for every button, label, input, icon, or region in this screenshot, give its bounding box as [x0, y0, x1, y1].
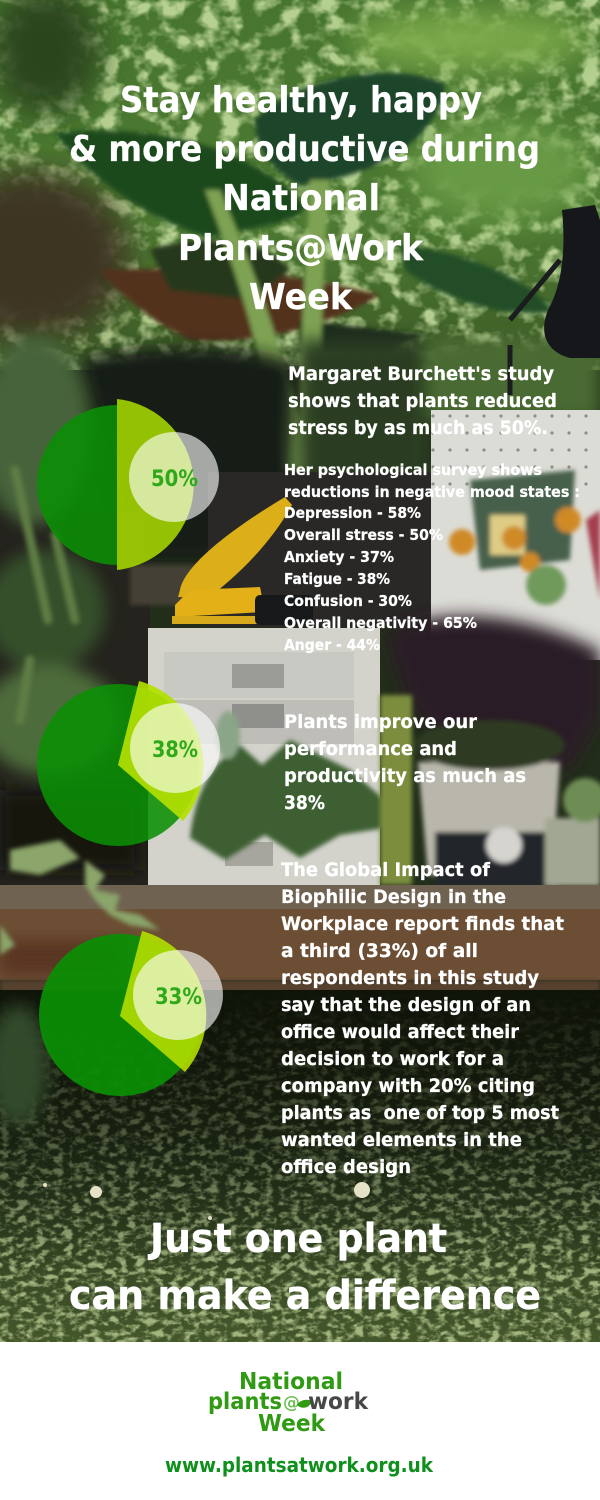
leaves: large upper plant	[55, 73, 555, 470]
foliage: dark plant behind pot	[80, 347, 295, 560]
text block: productivity: Plants improve our	[284, 711, 478, 733]
text block: biophilic design report: Workplace report finds that	[281, 913, 564, 935]
text block: productivity	[284, 711, 526, 814]
text block: mood states survey: Confusion - 30%	[284, 592, 412, 610]
text block: mood states survey: Anxiety - 37%	[284, 548, 394, 566]
foliage: left ground leaves	[0, 1005, 48, 1125]
text block: mood states survey: Anger - 44%	[284, 636, 380, 654]
scene: dark purple plant	[385, 616, 600, 770]
text block: mood states survey: Her psychological survey shows	[284, 461, 542, 479]
value circle	[129, 432, 219, 522]
foliage: left plants	[0, 335, 140, 870]
foliage: fern in drawer	[190, 711, 385, 860]
value circle	[130, 703, 220, 793]
scene: yellow stapler	[172, 497, 313, 625]
chart: 38% pie	[37, 681, 220, 846]
foliage: dark background masses	[0, 0, 590, 340]
logo: National plants@work Week: Week	[258, 1411, 326, 1437]
scene: left wall and fence	[0, 510, 150, 890]
pie base	[39, 934, 201, 1096]
pie highlighted slice	[117, 399, 194, 570]
text block: mood states survey: Fatigue - 38%	[284, 570, 390, 588]
text block: mood states survey: reductions in negative mood states :	[284, 483, 580, 501]
text block: stress study: Margaret Burchett's study	[288, 363, 555, 385]
icon: leaf	[297, 1400, 312, 1408]
icon: desk lamp	[510, 205, 600, 395]
pie highlighted slice	[118, 681, 203, 821]
pie base	[37, 405, 117, 565]
website url: www.plantsatwork.org.uk	[165, 1453, 434, 1477]
text block: mood states survey: Overall stress - 50%	[284, 526, 443, 544]
text block: biophilic design report: office design	[281, 1156, 411, 1178]
text block: biophilic design report: plants as one of top 5 most	[281, 1102, 559, 1124]
footer panel	[0, 1342, 600, 1500]
text block: biophilic design report: company with 20% citing	[281, 1075, 535, 1097]
closing statement	[69, 1216, 541, 1319]
logo: National plants@work Week	[208, 1369, 369, 1437]
scene: dark grass ground	[0, 990, 600, 1342]
text block: productivity: 38%	[284, 792, 325, 814]
logo: National plants@work Week: @	[283, 1393, 300, 1413]
icon: daisies in the grass	[43, 1182, 370, 1220]
logo: National plants@work Week: work	[308, 1389, 369, 1415]
text block: biophilic design report	[281, 859, 564, 1178]
scene: book and pot on the right	[380, 695, 600, 890]
text block: biophilic design report: a third (33%) of all	[281, 940, 478, 962]
text block: biophilic design report: Biophilic Design in the	[281, 886, 506, 908]
title: & more productive during	[69, 129, 540, 170]
value label: 50%	[151, 467, 198, 492]
value circle	[133, 950, 223, 1040]
closing statement: Just one plant	[147, 1216, 447, 1262]
scene: mid-section right backdrop	[300, 340, 430, 490]
scene: grey filing cabinet	[148, 628, 380, 886]
text block: productivity: productivity as much as	[284, 765, 526, 787]
text block: biophilic design report: decision to work for a	[281, 1048, 504, 1070]
logo: National plants@work Week: plants	[208, 1389, 282, 1415]
text block: biophilic design report: office would affect their	[281, 1021, 520, 1043]
title: Week	[249, 277, 353, 318]
text block: biophilic design report: respondents in this study	[281, 967, 540, 989]
scene: dark planter	[208, 472, 438, 627]
text block: productivity: performance and	[284, 738, 457, 760]
text block: mood states survey: Depression - 58%	[284, 504, 421, 522]
text block: mood states survey	[284, 461, 580, 654]
foliage: cactus stems	[15, 470, 75, 720]
value label: 38%	[152, 738, 198, 763]
text block: stress study: shows that plants reduced	[288, 390, 557, 412]
title	[69, 80, 540, 318]
scene: wooden shelf	[0, 885, 600, 994]
scene: white pegboard	[431, 410, 600, 660]
chart: 50% pie	[37, 399, 219, 570]
chart: 33% pie	[39, 931, 223, 1096]
value label: 33%	[155, 985, 202, 1010]
text block: biophilic design report: wanted elements in the	[281, 1129, 522, 1151]
text block: biophilic design report: say that the design of an	[281, 994, 531, 1016]
closing statement: can make a difference	[69, 1273, 541, 1319]
pie base	[37, 684, 199, 846]
logo: National plants@work Week: National	[239, 1369, 343, 1395]
foliage: hanging fern	[0, 840, 160, 955]
pie highlighted slice	[120, 931, 206, 1072]
title: Plants@Work	[178, 228, 424, 269]
title: National	[222, 178, 380, 219]
text block: biophilic design report: The Global Impact of	[281, 859, 491, 881]
text block: mood states survey: Overall negativity - 65%	[284, 614, 477, 632]
text block: stress study: stress by as much as 50%.	[288, 417, 548, 439]
title: Stay healthy, happy	[120, 80, 482, 121]
scene: pegboard poster and flowers	[449, 470, 600, 605]
text block: stress study	[288, 363, 557, 439]
